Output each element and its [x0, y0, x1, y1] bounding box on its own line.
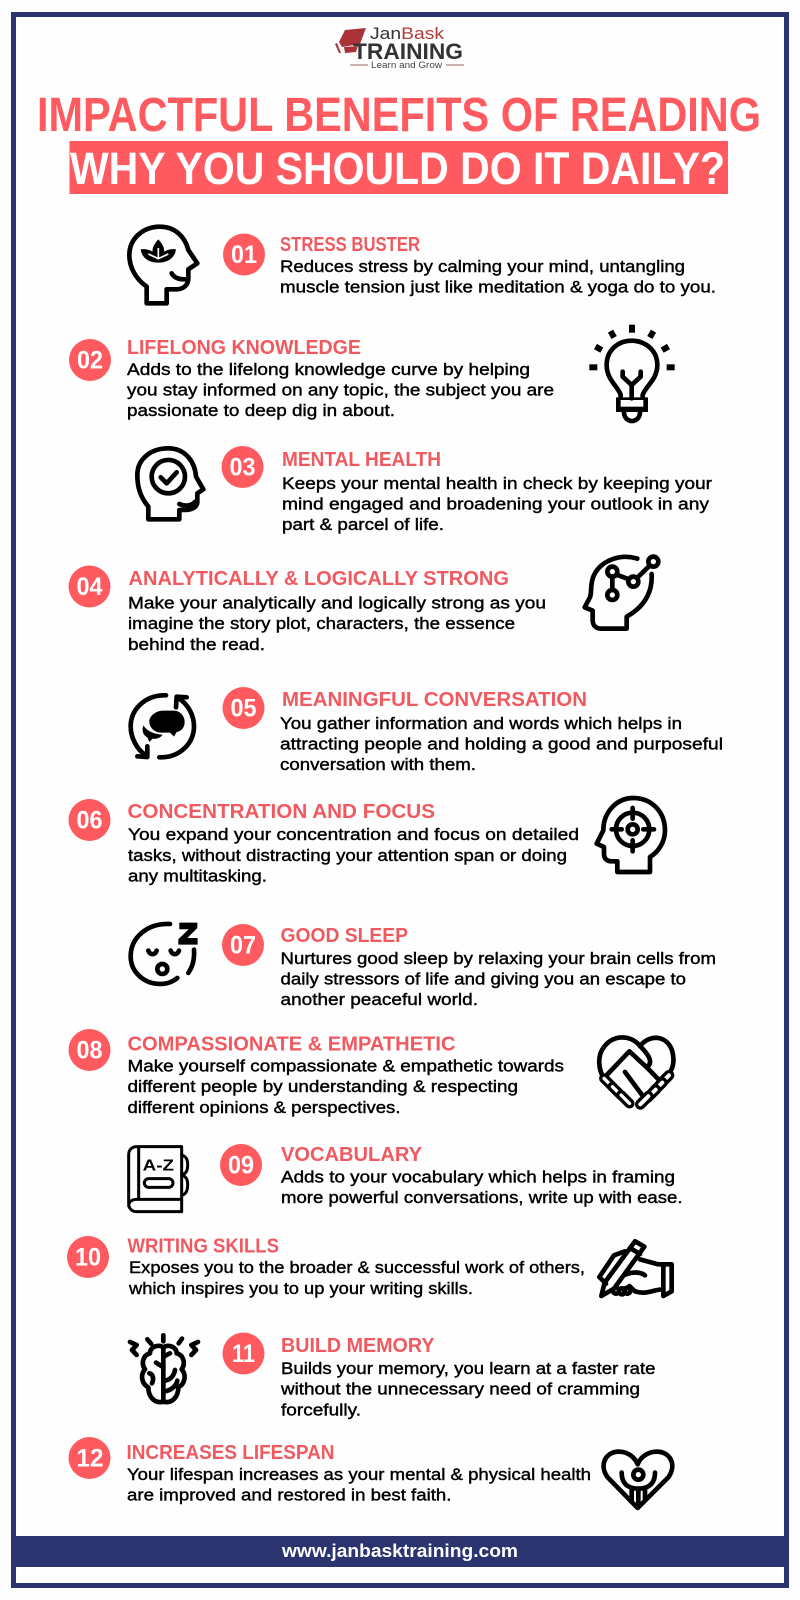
- item 12: increases lifespan: [68, 1437, 672, 1508]
- item 06: concentration and focus: [68, 798, 665, 886]
- footer band with website: www.janbasktraining.com: [281, 1541, 518, 1561]
- item 07: good sleep: daily stressors of life and giving you an escape to: [280, 970, 686, 988]
- item 07: good sleep: GOOD SLEEP: [280, 925, 408, 947]
- item 03: mental health: Keeps your mental health in check by keeping your: [282, 474, 712, 493]
- item 01: stress buster: [129, 227, 716, 303]
- subtitle banner: WHY YOU SHOULD DO IT DAILY?: [70, 143, 725, 194]
- item 11: build memory: BUILD MEMORY: [281, 1335, 435, 1357]
- logo training: TRAINING: [353, 39, 463, 64]
- item 06: concentration and focus: CONCENTRATION AND FOCUS: [128, 801, 435, 823]
- item 11: build memory: without the unnecessary need of cramming: [280, 1380, 640, 1398]
- item 03: mental health: part & parcel of life.: [282, 515, 444, 534]
- item 02: lifelong knowledge: you stay informed on any topic, the subject you are: [127, 380, 554, 400]
- icon: heart with person: [604, 1452, 672, 1508]
- item 10: writing skills: Exposes you to the broader & successful work of others,: [129, 1258, 585, 1277]
- item 06: concentration and focus: You expand your concentration and focus on detailed: [128, 825, 579, 844]
- item 02: lifelong knowledge: [69, 325, 675, 421]
- item 11: build memory: [130, 1332, 655, 1420]
- icon: hand holding pencil: [599, 1241, 672, 1296]
- item 09: vocabulary: more powerful conversations, write up with ease.: [281, 1188, 682, 1207]
- icon: head with network nodes: [585, 557, 658, 629]
- icon: light bulb: [589, 325, 675, 421]
- item 09: vocabulary: Adds to your vocabulary which helps in framing: [281, 1168, 675, 1186]
- icon: speech bubbles with cycle arrows: [131, 695, 194, 757]
- item 12: increases lifespan: are improved and restored in best faith.: [127, 1486, 452, 1504]
- item 04: analytically and logically strong: imagine the story plot, characters, the essence: [128, 614, 515, 633]
- item 09: vocabulary: VOCABULARY: [281, 1144, 423, 1166]
- item 01: stress buster: Reduces stress by calming your mind, untangling: [280, 257, 685, 276]
- item 10: writing skills: 10: [75, 1244, 101, 1272]
- item 01: stress buster: muscle tension just like meditation & yoga do to you.: [280, 278, 716, 296]
- item 06: concentration and focus: any multitasking.: [128, 866, 267, 886]
- item 03: mental health: mind engaged and broadening your outlook in any: [282, 494, 710, 514]
- item 12: increases lifespan: INCREASES LIFESPAN: [126, 1442, 334, 1464]
- icon: head with lotus: [129, 227, 197, 303]
- item 01: stress buster: 01: [231, 241, 257, 269]
- item 12: increases lifespan: Your lifespan increases as your mental & physical health: [127, 1465, 591, 1484]
- item 05: meaningful conversation: MEANINGFUL CONVERSATION: [282, 689, 587, 711]
- item 03: mental health: MENTAL HEALTH: [282, 449, 441, 471]
- icon: head with check mark: [137, 448, 203, 519]
- item 04: analytically and logically strong: ANALYTICALLY & LOGICALLY STRONG: [128, 568, 509, 590]
- item 09: vocabulary: 09: [228, 1152, 254, 1180]
- item 03: mental health: [137, 446, 712, 534]
- item 06: concentration and focus: 06: [76, 806, 102, 834]
- item 09: vocabulary: [129, 1144, 683, 1212]
- item 02: lifelong knowledge: Adds to the lifelong knowledge curve by helping: [127, 360, 530, 379]
- icon: dictionary book: [129, 1147, 188, 1212]
- item 02: lifelong knowledge: LIFELONG KNOWLEDGE: [127, 337, 361, 359]
- item 07: good sleep: Nurtures good sleep by relaxing your brain cells from: [280, 949, 716, 968]
- item 04: analytically and logically strong: behind the read.: [128, 635, 265, 654]
- item 11: build memory: forcefully.: [281, 1400, 361, 1420]
- item 05: meaningful conversation: conversation with them.: [280, 755, 476, 774]
- item 11: build memory: Builds your memory, you learn at a faster rate: [281, 1359, 656, 1378]
- item 04: analytically and logically strong: [68, 557, 658, 654]
- item 08: compassionate and empathetic: different people by understanding & respecting: [128, 1077, 518, 1096]
- icon: graduation cap: [335, 28, 366, 53]
- item 08: compassionate and empathetic: Make yourself compassionate & empathetic towards: [128, 1056, 564, 1076]
- item 06: concentration and focus: tasks, without distracting your attention span or doing: [128, 846, 567, 865]
- item 05: meaningful conversation: attracting people and holding a good and purposeful: [280, 734, 723, 754]
- item 11: build memory: 11: [232, 1340, 255, 1368]
- item 02: lifelong knowledge: passionate to deep dig in about.: [127, 401, 395, 420]
- item 05: meaningful conversation: You gather information and words which helps in: [280, 714, 682, 733]
- item 04: analytically and logically strong: 04: [76, 573, 103, 601]
- item 12: increases lifespan: 12: [76, 1444, 104, 1472]
- icon: dictionary book: A-Z: [143, 1158, 174, 1175]
- item 10: writing skills: WRITING SKILLS: [128, 1236, 279, 1258]
- item 01: stress buster: STRESS BUSTER: [280, 234, 420, 256]
- item 07: good sleep: 07: [230, 932, 256, 960]
- item 07: good sleep: another peaceful world.: [280, 990, 478, 1009]
- item 08: compassionate and empathetic: COMPASSIONATE & EMPATHETIC: [128, 1034, 456, 1056]
- logo tagline: Learn and Grow: [371, 60, 443, 70]
- item 02: lifelong knowledge: 02: [77, 346, 103, 374]
- item 10: writing skills: which inspires you to up your writing skills.: [128, 1279, 473, 1298]
- item 05: meaningful conversation: [131, 687, 723, 774]
- logo: [335, 24, 464, 70]
- icon: handshake heart: [599, 1037, 674, 1109]
- item 10: writing skills: [67, 1236, 672, 1298]
- item 05: meaningful conversation: 05: [230, 694, 257, 722]
- item 07: good sleep: [131, 923, 716, 1009]
- footer band with website: [11, 1536, 789, 1567]
- logo wordmark: JanBask: [370, 24, 445, 43]
- item 08: compassionate and empathetic: [68, 1029, 674, 1117]
- item 04: analytically and logically strong: Make your analytically and logically strong as you: [128, 594, 546, 612]
- icon: brain with sparks: [130, 1335, 198, 1402]
- icon: sleeping face: [131, 923, 198, 984]
- item 03: mental health: 03: [230, 454, 256, 482]
- icon: head with target: [597, 798, 665, 872]
- item 08: compassionate and empathetic: 08: [76, 1036, 103, 1064]
- item 08: compassionate and empathetic: different opinions & perspectives.: [128, 1098, 400, 1117]
